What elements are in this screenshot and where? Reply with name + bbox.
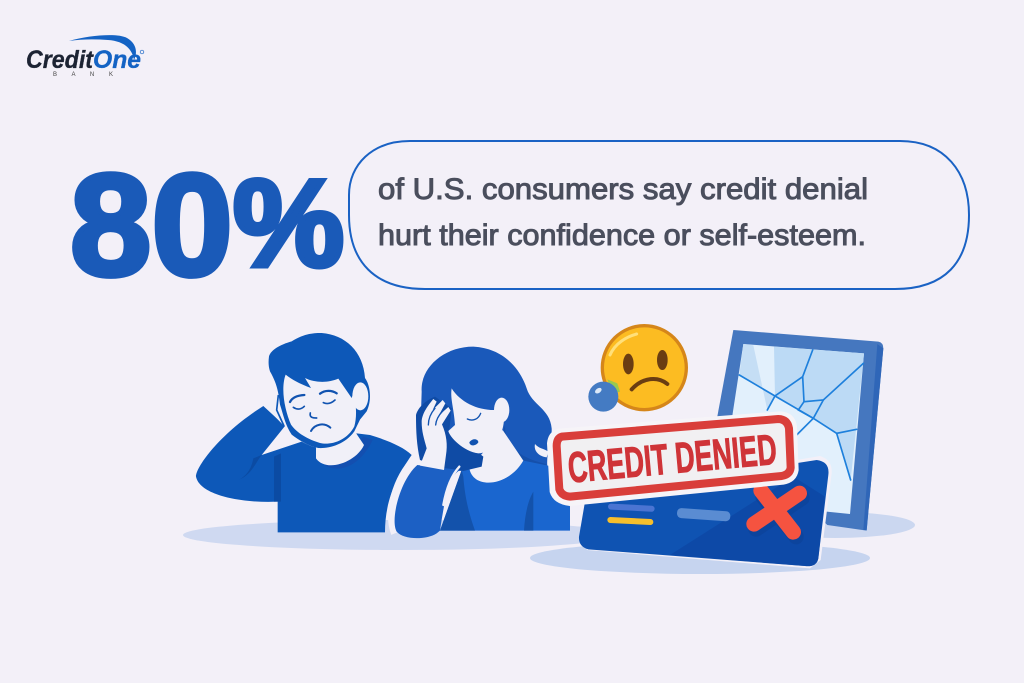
callout bubble bbox=[349, 141, 969, 289]
red X mark bbox=[754, 491, 802, 537]
callout text: hurt their confidence or self-esteem. bbox=[378, 219, 866, 252]
woman sleeve and arm bbox=[395, 465, 460, 538]
shadow under card bbox=[530, 542, 870, 574]
man head and hair bbox=[269, 333, 370, 448]
man features bbox=[290, 391, 337, 431]
illustration: sad man bbox=[196, 333, 412, 532]
headline statistic: 80%: 80 bbox=[70, 144, 233, 306]
ground shadow: mirror bbox=[755, 512, 915, 538]
stamp: credit denied bbox=[549, 413, 797, 504]
stamp text: CREDIT DENIED bbox=[566, 426, 779, 493]
woman hand bbox=[420, 399, 451, 470]
mirror cracks bbox=[739, 350, 863, 480]
ground shadow: people bbox=[183, 520, 617, 550]
mirror glass bbox=[732, 344, 864, 514]
woman face bbox=[448, 388, 504, 453]
woman hair bbox=[420, 347, 552, 472]
card body bbox=[579, 460, 829, 566]
woman features bbox=[467, 413, 481, 420]
man body and arm bbox=[196, 406, 412, 532]
logo: Credit One Bank: Credit bbox=[26, 46, 95, 74]
logo: Credit One Bank: B A N K bbox=[53, 72, 113, 78]
woman ear bbox=[494, 398, 509, 422]
card stripes bbox=[608, 503, 655, 512]
woman neck bbox=[469, 430, 523, 483]
logo: Credit One Bank: One bbox=[93, 46, 141, 74]
woman torso bbox=[440, 461, 570, 531]
woman shadow behind hand and chin bbox=[416, 397, 483, 471]
emoji tear bbox=[607, 379, 620, 393]
callout text: of U.S. consumers say credit denial bbox=[378, 173, 868, 206]
illustration: cracked mirror bbox=[717, 330, 883, 531]
card outline bbox=[587, 456, 832, 568]
woman hair strand highlight bbox=[535, 444, 548, 457]
illustration: sad emoji bbox=[588, 326, 686, 412]
man neck bbox=[316, 432, 364, 465]
illustration: credit card bbox=[579, 456, 832, 568]
man ear bbox=[352, 382, 368, 410]
man face bbox=[283, 375, 356, 444]
man hand bbox=[265, 395, 287, 426]
headline statistic: 80%: % bbox=[233, 155, 344, 293]
callout text bbox=[378, 173, 868, 252]
woman outline gap bbox=[392, 460, 415, 533]
emoji face bbox=[602, 326, 686, 410]
logo: Credit One Bank bbox=[26, 35, 144, 78]
mirror frame bbox=[717, 330, 883, 531]
illustration: sad woman bbox=[392, 347, 570, 538]
